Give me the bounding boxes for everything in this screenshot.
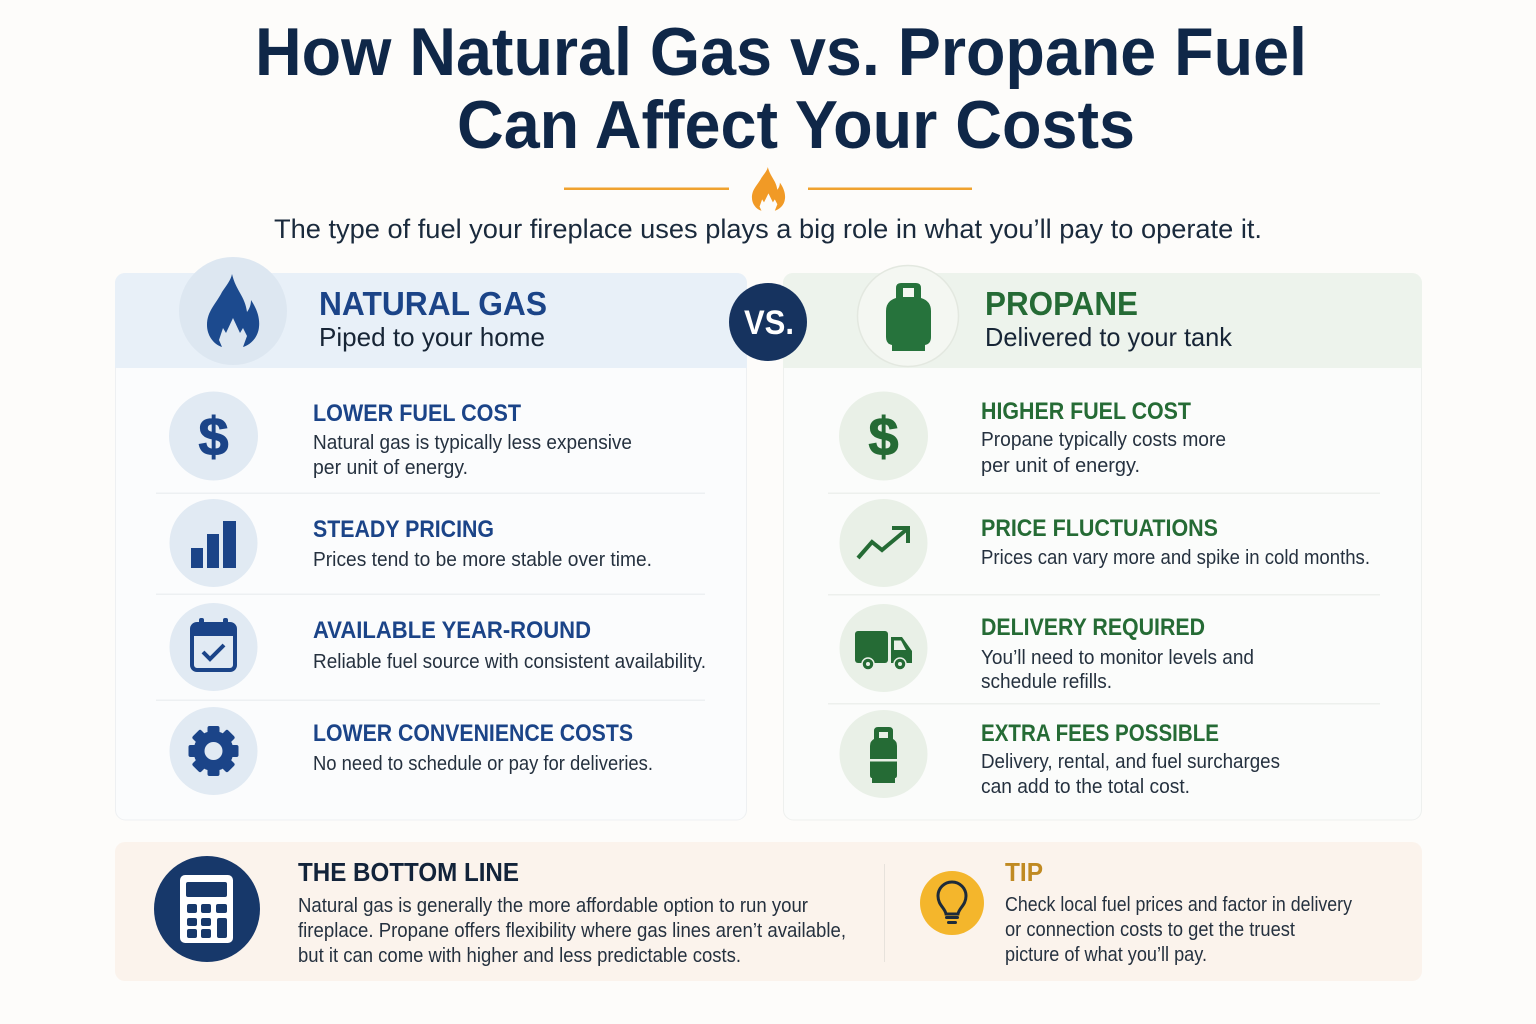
item: lower convenience costs: LOWER CONVENIENCE COSTS	[313, 720, 633, 747]
panel: bottom line and tip	[115, 842, 1422, 981]
natural gas header band	[115, 273, 747, 368]
item: delivery required: schedule refills.	[981, 671, 1112, 693]
title divider with flame	[564, 167, 972, 211]
icon: delivery truck	[840, 604, 928, 692]
item: available year-round: Reliable fuel source with consistent availability.	[313, 651, 706, 673]
the bottom line text: Natural gas is generally the more affordable option to run your	[298, 895, 808, 917]
propane heading: PROPANE	[985, 285, 1138, 322]
icon: bar chart	[170, 499, 258, 587]
item: steady pricing: Prices tend to be more stable over time.	[313, 549, 652, 571]
item: lower convenience costs	[313, 720, 653, 775]
title	[255, 14, 1307, 163]
natural gas heading: NATURAL GAS	[319, 285, 547, 322]
item: lower fuel cost: Natural gas is typically less expensive	[313, 432, 632, 454]
subtitle: The type of fuel your fireplace uses plays a big role in what you’ll pay to operate it.	[274, 214, 1262, 244]
tip text: Check local fuel prices and factor in delivery	[1005, 894, 1352, 916]
tip text	[1005, 857, 1352, 966]
the bottom line text	[298, 857, 846, 967]
item: lower fuel cost: per unit of energy.	[313, 457, 468, 479]
item: extra fees possible: can add to the total cost.	[981, 776, 1190, 798]
icon: rising trend arrow	[840, 499, 928, 587]
icon: calculator	[154, 856, 260, 962]
tip text: picture of what you’ll pay.	[1005, 944, 1207, 966]
item: higher fuel cost: HIGHER FUEL COST	[981, 398, 1191, 425]
item: price fluctuations: PRICE FLUCTUATIONS	[981, 515, 1218, 542]
item: price fluctuations: Prices can vary more and spike in cold months.	[981, 547, 1370, 569]
item: extra fees possible	[981, 720, 1280, 798]
panel: propane	[783, 266, 1422, 820]
icon: dollar green: $	[868, 407, 899, 467]
item: extra fees possible: EXTRA FEES POSSIBLE	[981, 720, 1219, 747]
item: available year-round: AVAILABLE YEAR-ROUND	[313, 617, 591, 644]
icon: natural gas flame	[179, 257, 287, 365]
icon: light bulb	[920, 871, 984, 935]
tip text: or connection costs to get the truest	[1005, 919, 1295, 941]
item: higher fuel cost: Propane typically costs more	[981, 429, 1226, 451]
propane heading	[985, 285, 1233, 352]
natural gas heading	[319, 285, 547, 352]
item: delivery required: You’ll need to monitor levels and	[981, 647, 1254, 669]
title: Can Affect Your Costs	[457, 87, 1135, 163]
panel: natural gas	[115, 257, 747, 820]
item: higher fuel cost: per unit of energy.	[981, 455, 1140, 477]
item: delivery required	[981, 614, 1254, 693]
the bottom line text: fireplace. Propane offers flexibility where gas lines aren’t available,	[298, 920, 846, 942]
icon: dollar green	[839, 392, 928, 480]
item: delivery required: DELIVERY REQUIRED	[981, 614, 1205, 641]
vs badge: VS.	[744, 304, 794, 342]
item: price fluctuations	[981, 515, 1370, 569]
icon: gear	[170, 707, 258, 795]
item: available year-round	[313, 617, 706, 673]
the bottom line text: but it can come with higher and less predictable costs.	[298, 945, 741, 967]
item: lower fuel cost	[313, 400, 632, 479]
propane header band	[783, 273, 1422, 368]
tip text: TIP	[1005, 857, 1043, 887]
title: How Natural Gas vs. Propane Fuel	[255, 14, 1307, 90]
item: steady pricing	[313, 516, 652, 571]
icon: dollar: $	[198, 407, 229, 467]
icon: propane tank	[858, 266, 958, 366]
the bottom line text: THE BOTTOM LINE	[298, 857, 519, 887]
item: lower convenience costs: No need to schedule or pay for deliveries.	[313, 753, 653, 775]
item: higher fuel cost	[981, 398, 1226, 477]
icon: calendar	[170, 603, 258, 691]
icon: small propane cylinder	[840, 710, 928, 798]
natural gas heading: Piped to your home	[319, 322, 545, 352]
item: steady pricing: STEADY PRICING	[313, 516, 494, 543]
vs badge	[729, 283, 807, 361]
icon: dollar	[169, 392, 258, 480]
propane heading: Delivered to your tank	[985, 322, 1233, 352]
item: extra fees possible: Delivery, rental, and fuel surcharges	[981, 751, 1280, 773]
item: lower fuel cost: LOWER FUEL COST	[313, 400, 521, 427]
